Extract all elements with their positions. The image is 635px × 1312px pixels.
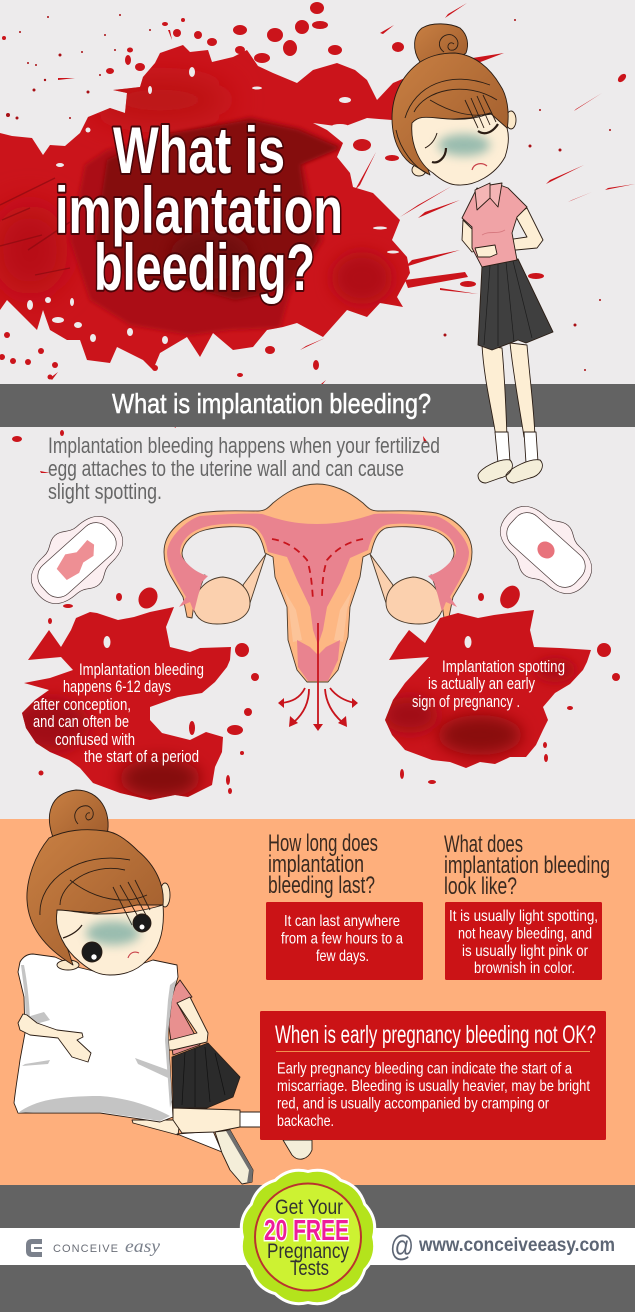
left ovary [193,577,250,624]
splat text: left: happens 6-12 days [63,678,171,696]
badge text: Pregnancy [267,1240,349,1263]
eye [133,914,151,932]
logo: conceive easy [26,1236,160,1257]
speckles [6,14,611,371]
warning body: backache. [277,1113,334,1130]
question: what does: What does [444,831,523,858]
arm [143,997,208,1056]
bruise on cheek [86,921,140,945]
dashed fallopian paths [272,539,363,600]
face [412,113,508,185]
uterus outer [164,484,472,682]
illustration: standing girl [392,24,553,483]
face [57,905,163,975]
answer box: how long [266,902,423,980]
arm on pillow [18,1014,91,1062]
splat hole [104,636,110,648]
question: how long [268,830,378,899]
warning box [260,1011,606,1140]
right ovary [386,577,443,624]
eye highlight [140,924,144,930]
arm [462,208,543,252]
splat text: right: is actually an early [428,675,536,693]
icon: sanitary pad right [485,491,607,609]
legs [482,343,535,437]
brow [425,133,437,148]
illustration: uterus [164,484,472,731]
badge text: Tests [290,1257,329,1280]
far leg shoe [283,1140,312,1159]
skirt [172,1043,240,1108]
logo: conceive easy: CONCEIVE [53,1243,118,1255]
lower cervix pink [297,640,340,681]
title: What is [113,113,285,187]
upper leg [173,1108,240,1133]
sock [240,1112,262,1127]
closed eyes [432,124,498,162]
warning body [277,1060,590,1130]
pillow [14,954,178,1122]
footer band [0,1185,635,1312]
logo: conceive easy: easy [125,1236,160,1256]
band heading text: What is implantation bleeding? [112,388,431,419]
bun spiral [439,35,458,52]
splat text: left: and can often be [33,713,129,731]
eye [82,942,102,962]
left ear [412,164,426,176]
question: what does: look like? [444,873,517,900]
bun [415,24,468,72]
splat text: left [33,661,204,766]
splat text: right [412,658,565,711]
collar [475,183,502,210]
eye highlight [91,954,97,960]
badge: 20 free pregnancy tests [243,1172,373,1302]
ear [160,883,170,907]
body lighter peach [284,590,352,642]
icon: sanitary pad left [16,501,138,619]
website link: www.conceiveeasy.com [418,1235,615,1256]
shoe sole [226,1130,253,1183]
title: bleeding? [94,230,315,304]
splat text: left: Implantation bleeding [79,661,204,679]
uterus pink interior [167,514,469,645]
warning body: red, and is usually accompanied by cramping or [277,1096,550,1112]
left ear [57,960,79,970]
orange panel [0,819,635,1186]
badge text: Get Your [275,1196,343,1219]
mouth [472,164,487,170]
holes in splat [0,67,399,344]
title: implantation [55,173,343,247]
illustration: sitting girl [14,790,312,1184]
warning body: Early pregnancy bleeding can indicate the start of a [277,1060,572,1078]
intro paragraph: egg attaches to the uterine wall and can cause [48,456,404,481]
question: what does [444,831,610,900]
intro paragraph: Implantation bleeding happens when your fertilized [48,433,440,458]
shoe [215,1130,253,1184]
lower leg [132,1120,180,1135]
answer box: what does: not heavy bleeding, and [458,926,592,942]
socks [495,432,538,463]
answer box: what does [445,902,602,980]
question: how long: implantation [268,851,364,878]
answer box: what does: is usually light pink or [462,943,589,960]
main blood splatter [0,2,635,473]
shirt [165,980,200,1055]
splat text: right: sign of pregnancy . [412,693,520,711]
website link [390,1230,615,1263]
hair strand lines [396,79,497,174]
bun spiral [75,806,93,824]
hair strand lines [40,858,150,925]
skirt [478,259,553,350]
bruise on cheek [438,134,490,156]
question: how long: How long does [268,830,378,857]
pillow shading [18,965,176,1121]
splat text: left: confused with [55,731,135,749]
title [55,113,343,304]
bun [49,790,108,845]
splat text: left: the start of a period [84,748,199,766]
hair [392,53,508,175]
skirt pleats [182,1047,225,1107]
right blood splat [382,582,620,784]
skirt pleats [484,261,532,346]
arrows flowing down [278,623,358,731]
right ligament [370,554,393,603]
left ligament [243,554,266,603]
splat hole [464,636,472,648]
answer box: what does: brownish in color. [474,960,575,977]
answer box: how long: few days. [316,948,369,965]
hair [27,830,163,965]
right ear [506,111,516,129]
left blood splat [10,584,259,800]
shirt [462,185,527,267]
intro paragraph [48,433,440,504]
badge text: 20 FREE [264,1215,349,1247]
splat text: left: after conception, [33,696,131,714]
answer box: how long: It can last anywhere [284,913,400,930]
website link: @ [390,1230,414,1263]
splat text: right: Implantation spotting [442,658,565,676]
heading band [0,384,635,427]
shirt fold [482,230,505,235]
lower sock [177,1131,222,1152]
question: how long: bleeding last? [268,872,375,899]
answer box: what does: It is usually light spotting, [449,908,598,925]
badge text [264,1196,349,1280]
intro paragraph: slight spotting. [48,479,162,504]
hands [475,245,497,257]
mouth [128,952,139,958]
shoes [478,460,542,483]
eyebrow [63,925,82,938]
answer box: how long: from a few hours to a [281,930,403,948]
